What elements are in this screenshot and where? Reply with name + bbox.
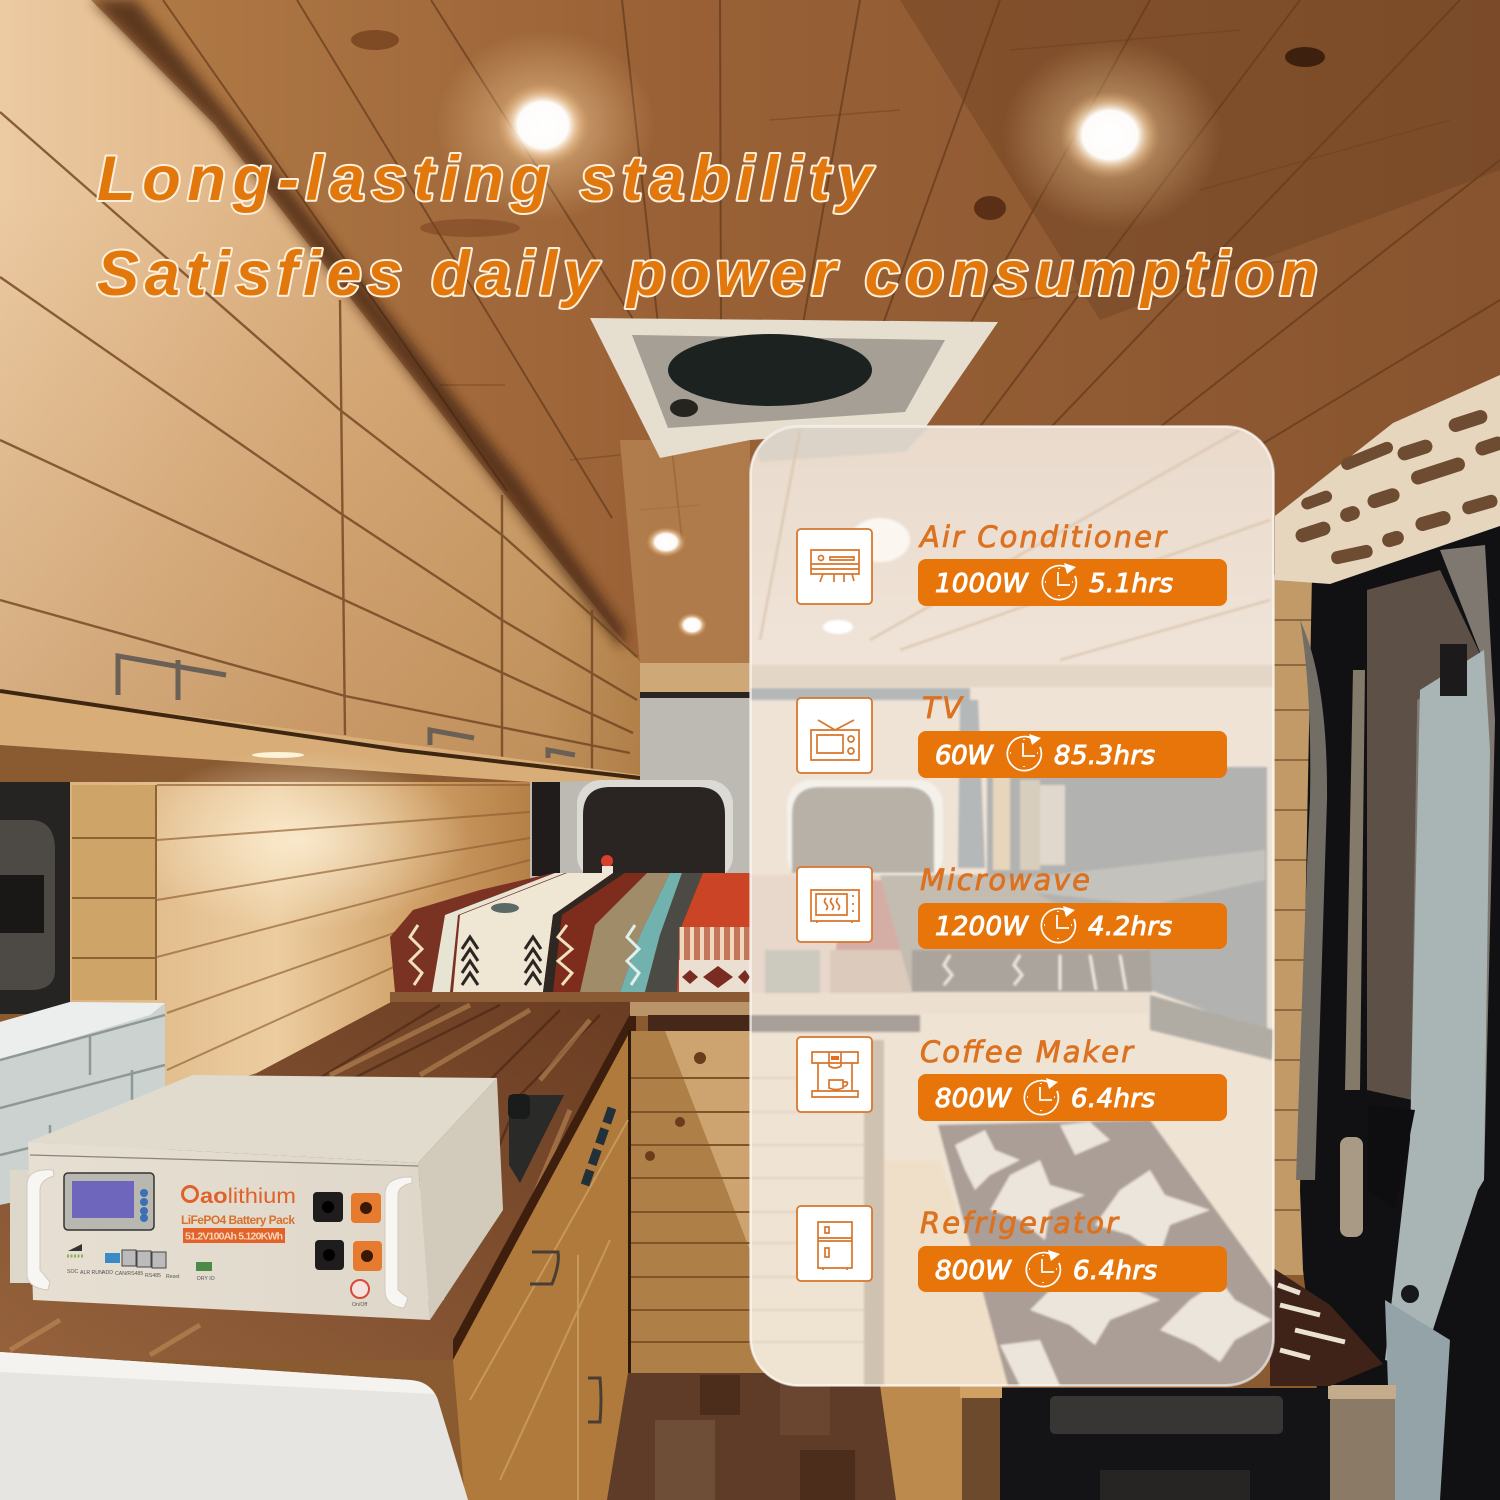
- runtime bar: 800W 6.4hrs: 800W: [935, 1256, 1012, 1286]
- ceiling lights: [435, 30, 1222, 637]
- product name: LiFePO4 Battery Pack: [181, 1213, 295, 1227]
- battery rack ears: [10, 1170, 444, 1300]
- runtime bar: 1000W 5.1hrs: 1000W: [935, 569, 1029, 599]
- right side wood wall: [1270, 575, 1315, 1275]
- title: Long-lasting stability: [97, 144, 875, 214]
- stove burner: [508, 1094, 564, 1183]
- status ports and labels: SOC: [67, 1269, 78, 1275]
- runtime bar: 1000W 5.1hrs: 5.1hrs: [1089, 569, 1173, 599]
- climbing holds rail: [1275, 375, 1500, 584]
- runtime bar: 800W 6.4hrs: 800W: [935, 1084, 1012, 1114]
- center wood cabinet: [628, 1002, 880, 1374]
- van side window left: [0, 782, 70, 1014]
- runtime bar: 60W 85.3hrs: [918, 731, 1227, 778]
- status ports and labels: RS485: [145, 1273, 161, 1279]
- title: Satisfies daily power consumption: [97, 239, 1318, 309]
- item: tv: [797, 691, 1227, 778]
- counter edge: [453, 1003, 636, 1360]
- right handle: [385, 1177, 412, 1308]
- butcher block counter: [0, 1000, 636, 1360]
- runtime bar: 800W 6.4hrs: [918, 1246, 1227, 1292]
- lit backsplash: [70, 782, 530, 1100]
- runtime bar: 800W 6.4hrs: [918, 1074, 1227, 1121]
- wood ceiling: [90, 0, 1500, 665]
- label: air conditioner: Air Conditioner: [918, 520, 1168, 554]
- brand logo: aolithium: [200, 1185, 296, 1208]
- battery terminals: [313, 1192, 382, 1271]
- runtime bar: 1200W 4.2hrs: [918, 903, 1227, 949]
- item: refrigerator: [797, 1206, 1227, 1292]
- runtime bar: 60W 85.3hrs: 60W: [935, 741, 994, 771]
- item: microwave: [797, 863, 1227, 949]
- battery pack product: [10, 1075, 503, 1320]
- upper left wood cabinets: [0, 0, 640, 775]
- backsplash light pool: [130, 750, 470, 930]
- lower cabinet doors: [453, 1035, 628, 1500]
- runtime bar: 800W 6.4hrs: 6.4hrs: [1073, 1256, 1157, 1286]
- status ports and labels: DRY IO: [197, 1276, 215, 1282]
- item: coffee maker: [797, 1035, 1227, 1121]
- back of van with window: [530, 663, 750, 880]
- storage box: [1000, 1388, 1393, 1500]
- icon: tv: [797, 698, 872, 773]
- bench end block: [1328, 1385, 1396, 1500]
- translucent panel: [750, 426, 1274, 1386]
- label: microwave: Microwave: [920, 863, 1090, 897]
- power button: [351, 1280, 369, 1308]
- cabinet underside: [0, 690, 640, 785]
- icon: microwave: [797, 867, 872, 942]
- status ports and labels: [67, 1244, 215, 1282]
- runtime bar: 1000W 5.1hrs: [918, 559, 1227, 606]
- item: air conditioner: [797, 520, 1227, 606]
- white farmhouse sink: [0, 1352, 468, 1500]
- left handle: [27, 1170, 54, 1290]
- bench frame: [880, 1385, 1002, 1500]
- roof vent: [590, 318, 998, 458]
- runtime bar: 800W 6.4hrs: 6.4hrs: [1071, 1084, 1155, 1114]
- icon: refrigerator: [797, 1206, 872, 1281]
- label: coffee maker: Coffee Maker: [920, 1035, 1135, 1069]
- bed with patterned blanket: [385, 870, 755, 995]
- power button: On/Off: [352, 1302, 368, 1308]
- voltage capacity tag: 51.2V100Ah 5.120KWh: [185, 1230, 283, 1242]
- runtime bar: 1200W 4.2hrs: 1200W: [935, 912, 1029, 942]
- status ports and labels: CAN/RS485: [115, 1271, 143, 1277]
- ghosted photo inside panel: [750, 426, 1274, 1386]
- runtime bar: 60W 85.3hrs: 85.3hrs: [1054, 741, 1155, 771]
- floor: [607, 1373, 896, 1500]
- status ports and labels: ALR RUN: [80, 1270, 103, 1276]
- icon: air conditioner: [797, 529, 872, 604]
- bed platform: [390, 992, 750, 1002]
- title: [97, 144, 1318, 309]
- status ports and labels: ADD: [102, 1270, 113, 1276]
- bench blanket beyond panel: [1270, 1266, 1383, 1386]
- status ports and labels: Reset: [166, 1274, 180, 1280]
- lcd display: [64, 1173, 154, 1230]
- white tile backsplash: [0, 1002, 165, 1205]
- cabinet handles: [118, 656, 575, 758]
- label: tv: TV: [922, 691, 964, 725]
- icon: coffee maker: [797, 1037, 872, 1112]
- runtime bar: 1200W 4.2hrs: 4.2hrs: [1088, 912, 1172, 942]
- label: refrigerator: Refrigerator: [920, 1206, 1120, 1240]
- battery front face: [28, 1142, 430, 1320]
- battery top and side: [28, 1075, 503, 1320]
- van door opening and white door: [1296, 520, 1500, 1500]
